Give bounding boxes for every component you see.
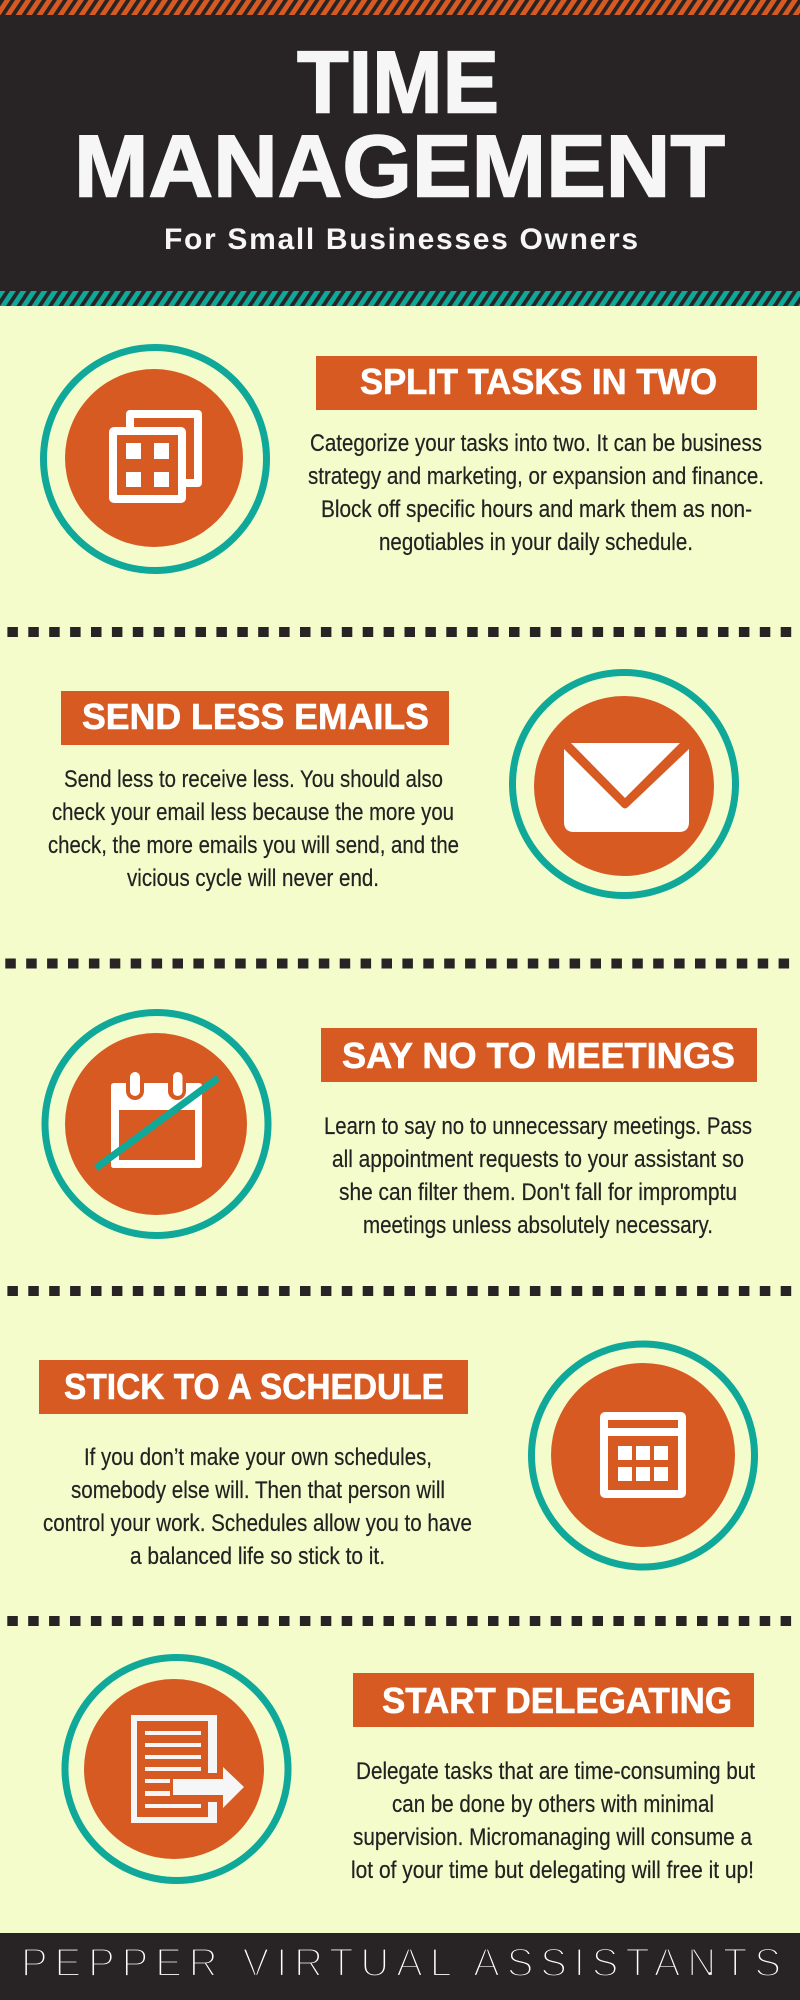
panel: stick to a schedule <box>39 1344 754 1570</box>
heading: start delegating: START DELEGATING <box>382 1680 732 1721</box>
text block: send less emails: check, the more emails you will send, and the <box>48 832 459 859</box>
panel: send less emails <box>48 672 736 896</box>
heading: split tasks in two <box>316 356 757 410</box>
icon: schedule calendar <box>532 1344 754 1567</box>
text block: split tasks: negotiables in your daily schedule. <box>379 529 693 556</box>
text block: say no to meetings: all appointment requests to your assistant so <box>332 1146 744 1173</box>
text block: start delegating: lot of your time but delegating will free it up! <box>351 1857 754 1884</box>
icon: document with arrow <box>65 1658 288 1880</box>
heading: send less emails: SEND LESS EMAILS <box>82 696 429 737</box>
heading: split tasks in two: SPLIT TASKS IN TWO <box>360 361 717 402</box>
text block: say no to meetings: she can filter them. Don't fall for impromptu <box>339 1179 737 1206</box>
heading: say no to meetings <box>321 1028 757 1082</box>
text block: stick to a schedule <box>43 1444 472 1570</box>
text block: stick to a schedule: a balanced life so stick to it. <box>130 1543 385 1570</box>
text block: start delegating: can be done by others with minimal <box>392 1791 714 1818</box>
footer <box>0 1933 800 2000</box>
icon: overlapping squares <box>44 348 266 570</box>
heading: say no to meetings: SAY NO TO MEETINGS <box>342 1035 735 1076</box>
text block: say no to meetings: meetings unless absolutely necessary. <box>363 1212 713 1239</box>
header banner <box>0 0 800 306</box>
text block: start delegating <box>351 1758 755 1884</box>
text block: split tasks <box>308 430 764 556</box>
text block: send less emails: vicious cycle will never end. <box>127 865 379 892</box>
footer text: PEPPER VIRTUAL ASSISTANTS <box>21 1941 781 1985</box>
text block: stick to a schedule: control your work. Schedules allow you to have <box>43 1510 472 1537</box>
text block: stick to a schedule: If you don’t make your own schedules, <box>84 1444 432 1471</box>
title: MANAGEMENT <box>74 116 725 216</box>
text block: send less emails <box>48 766 459 892</box>
icon: envelope <box>512 672 736 896</box>
heading: stick to a schedule: STICK TO A SCHEDULE <box>64 1366 444 1407</box>
text block: send less emails: check your email less because the more you <box>52 799 454 826</box>
panel: say no to meetings <box>45 1012 757 1239</box>
text block: stick to a schedule: somebody else will. Then that person will <box>71 1477 445 1504</box>
text block: say no to meetings <box>324 1113 752 1239</box>
icon: crossed-out calendar <box>45 1012 268 1236</box>
heading: send less emails <box>61 691 449 745</box>
text block: send less emails: Send less to receive less. You should also <box>64 766 443 793</box>
title: TIME <box>297 32 499 132</box>
subtitle: For Small Businesses Owners <box>164 223 638 256</box>
title <box>74 32 725 216</box>
panel: split tasks in two <box>44 348 764 570</box>
panel: start delegating <box>65 1658 755 1884</box>
heading: start delegating <box>353 1673 754 1727</box>
